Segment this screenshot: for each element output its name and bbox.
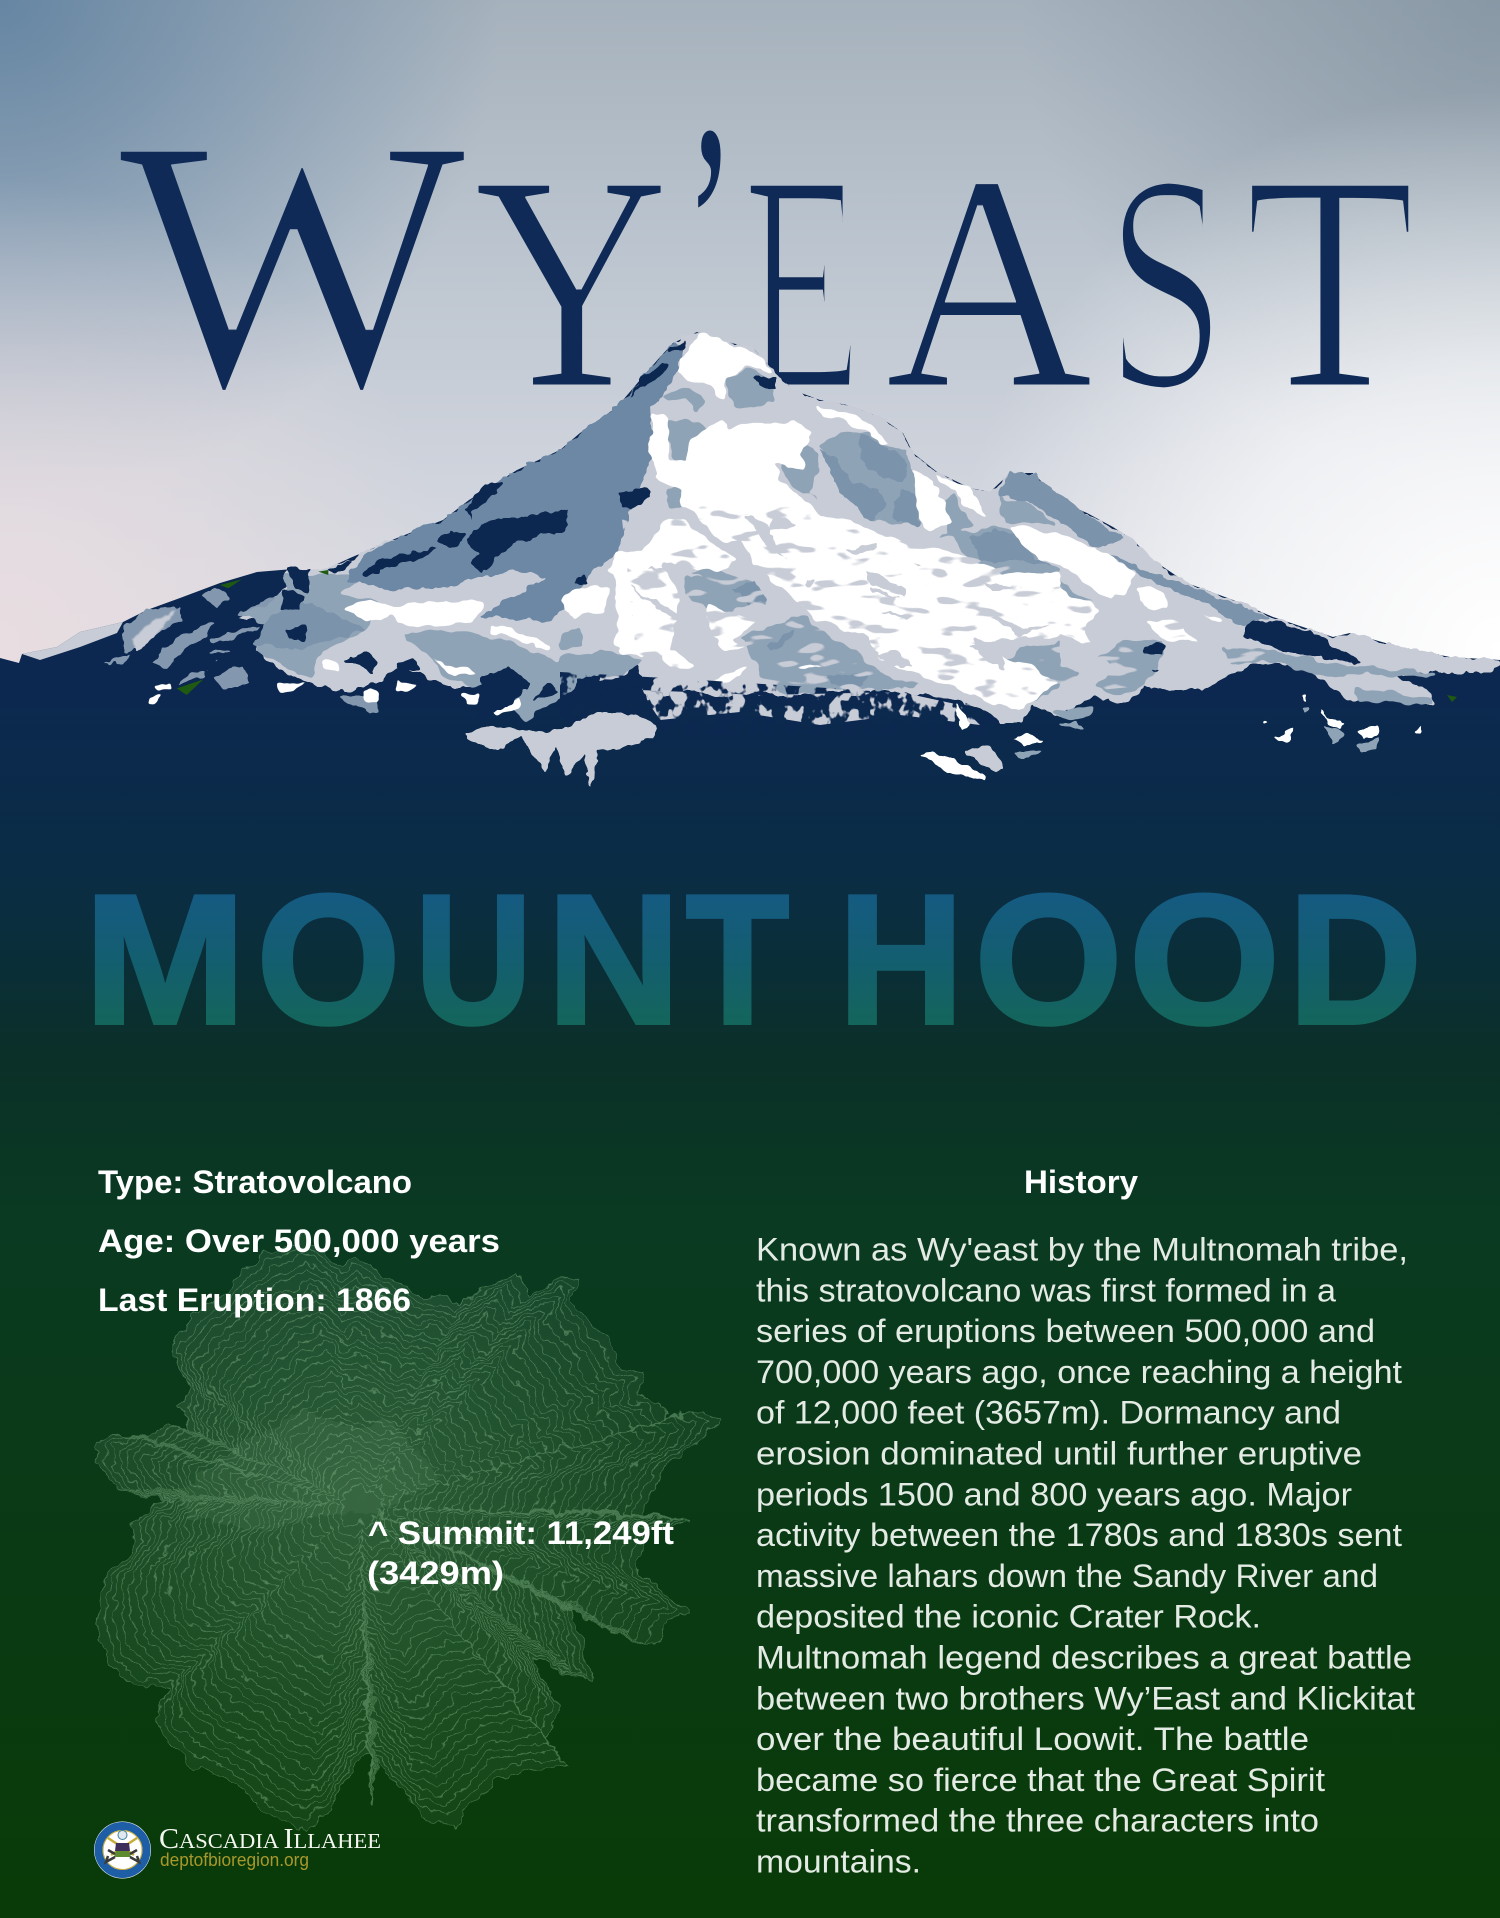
grey patches in the forest [1012,708,1380,760]
heading: Mount Hood: T [686,856,789,1062]
heading: Mount Hood: M [84,856,246,1062]
history text: became so fierce that the Great Spirit [756,1762,1325,1798]
heading: Mount Hood: H [838,856,964,1062]
sky background [0,0,1500,720]
left shoulder streaks [100,587,377,713]
snow island below the glacier [465,713,655,792]
logo wordmark: CASCADIA ILLAHEE [159,1824,381,1855]
logo website: deptofbioregion.org [160,1850,309,1870]
heading: Mount Hood [84,856,1422,1062]
title: Wy'east: S [1104,113,1228,451]
title: Wy'east: A [884,113,1094,451]
history text: between two brothers Wy’East and Klickitat [756,1680,1415,1716]
title: Wy'east [117,63,1417,463]
title: Wy'east: ’ [685,63,735,395]
history text: periods 1500 and 800 years ago. Major [756,1476,1352,1512]
history text: mountains. [756,1844,921,1880]
heading: Mount Hood: O [256,856,400,1062]
history text: erosion dominated until further eruptive [756,1436,1362,1472]
darker slate patches [253,433,1270,687]
grey marks on the white slope [623,513,1060,670]
mid grey shadows [240,370,1437,720]
history text: transformed the three characters into [756,1803,1319,1839]
heading: Mount Hood: N [547,856,680,1062]
summit label: ^ Summit: 11,249ft [368,1515,674,1551]
pale snow base layer [237,332,1500,723]
illustration: snow-capped Mount Hood [0,332,1500,792]
history heading: History [1024,1164,1138,1200]
history text: Multnomah legend describes a great battle [756,1640,1412,1676]
heading: Mount Hood: U [415,856,532,1062]
fact: age: Age: Over 500,000 years [98,1223,500,1259]
history text: series of eruptions between 500,000 and [756,1313,1375,1349]
pale sliver on far left ridge [22,622,123,660]
history text [756,1232,1415,1880]
history text: over the beautiful Loowit. The battle [756,1721,1309,1757]
white snow patches in the forest [918,697,1423,782]
snow blotches below snow line [640,690,980,725]
icon: Cascadia seal logo [94,1822,151,1878]
navy to green ground gradient [0,672,1500,1918]
mountain silhouette [0,332,1500,700]
title: Wy'east: Y [473,113,670,451]
navy crevasses [280,340,1363,723]
white snow fields [148,332,1227,715]
history text: activity between the 1780s and 1830s sent [756,1517,1402,1553]
forest blotches at snow line [560,672,1000,735]
fine flow marks [620,500,1300,700]
title: Wy'east: T [1243,113,1417,451]
heading: Mount Hood: D [1288,856,1422,1062]
history text: 700,000 years ago, once reaching a height [756,1354,1402,1390]
heading: Mount Hood: O [974,856,1122,1062]
fact: last eruption: Last Eruption: 1866 [98,1282,411,1318]
heading: Mount Hood: O [1129,856,1280,1062]
history text: this stratovolcano was first formed in a [756,1272,1336,1308]
title: Wy'east: E [741,113,865,451]
fact: type: Type: Stratovolcano [98,1164,412,1200]
summit label [367,1515,674,1591]
green tree patches [177,570,1457,702]
history text: of 12,000 feet (3657m). Dormancy and [756,1395,1341,1431]
history text: Known as Wy'east by the Multnomah tribe, [756,1232,1408,1268]
history text: massive lahars down the Sandy River and [756,1558,1378,1594]
title: Wy'east: W [117,68,471,463]
history text: deposited the iconic Crater Rock. [756,1599,1261,1635]
summit label: (3429m) [367,1555,504,1591]
slate left face [347,343,683,622]
topographic contour map [97,1236,719,1832]
